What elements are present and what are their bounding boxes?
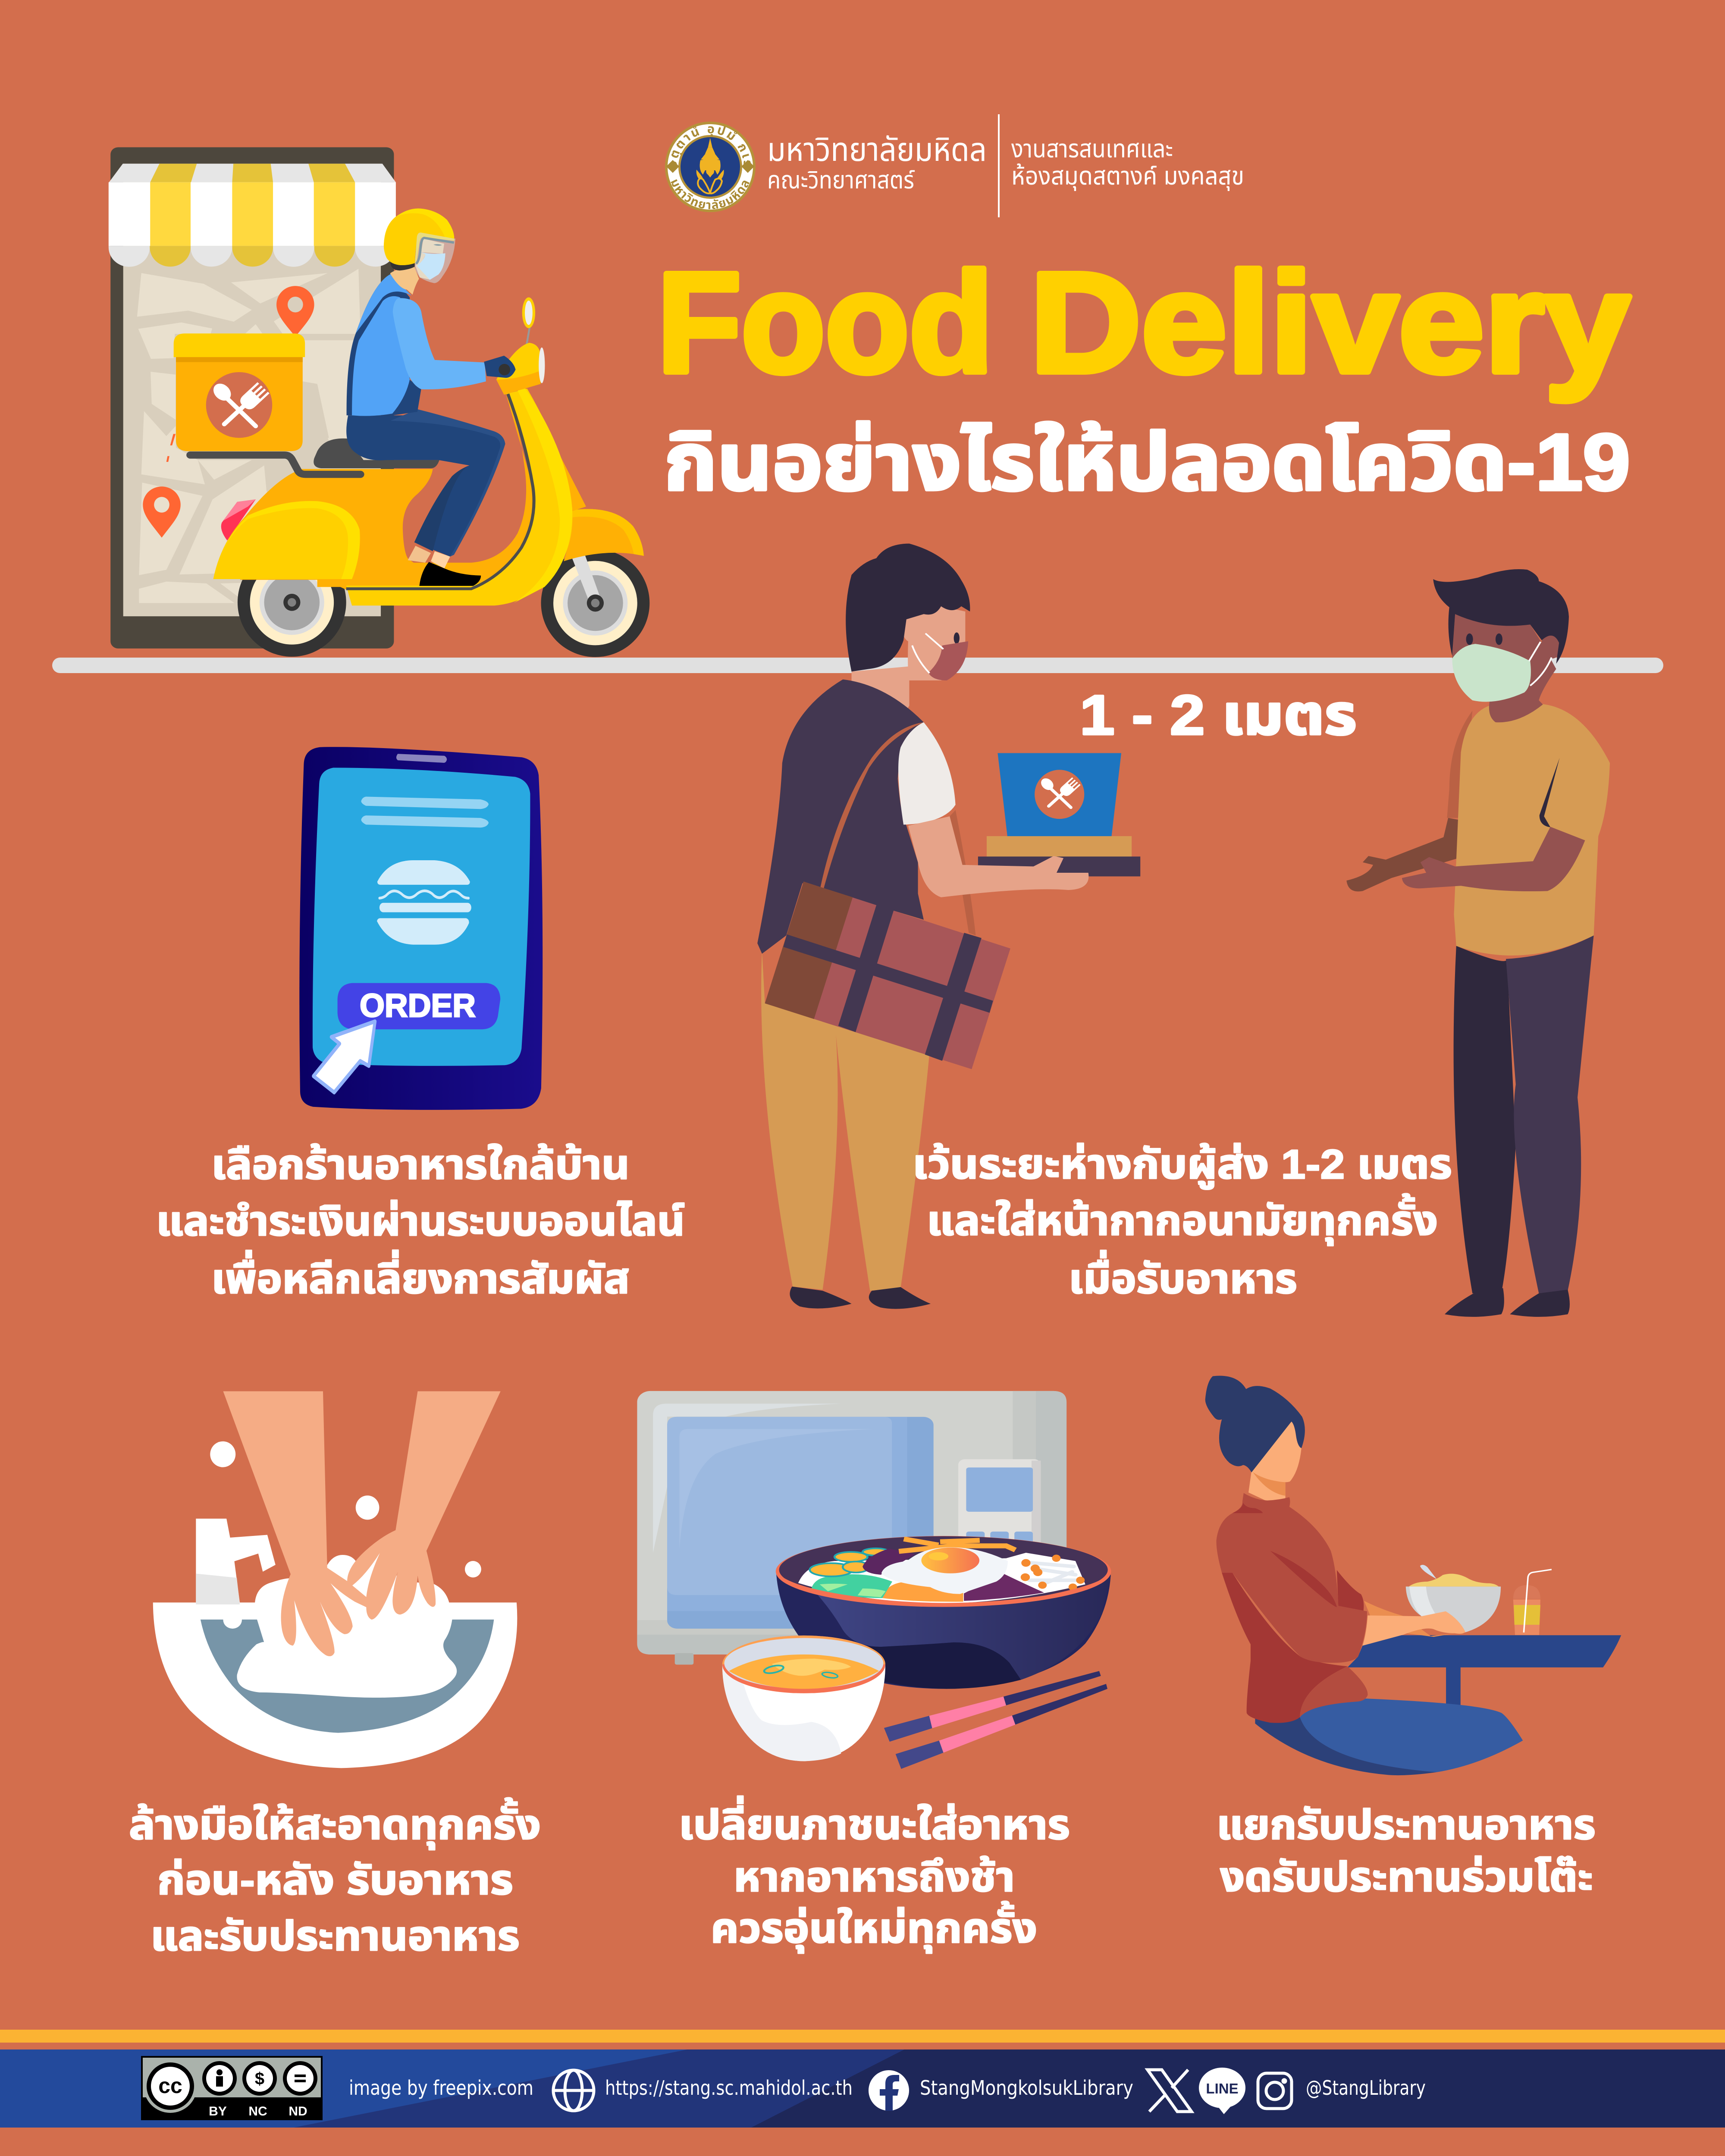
distance label: 1 - 2 เมตร [1080, 683, 1357, 746]
shoulder bag [765, 882, 1010, 1069]
bubbles [210, 1442, 481, 1577]
delivery person [1346, 569, 1610, 1317]
sink [153, 1602, 517, 1768]
illustration: delivery rider on scooter in front of phone map [109, 147, 649, 657]
rider body [346, 274, 516, 586]
title [657, 243, 1631, 403]
text block: eat separately [1217, 1802, 1596, 1900]
CC license badge: ND [289, 2104, 307, 2118]
awning [109, 164, 396, 267]
soup bowl [722, 1636, 885, 1761]
scooter body [190, 298, 644, 605]
logo seal [665, 122, 756, 212]
bowl of food [1406, 1565, 1501, 1633]
rear wheel [238, 548, 346, 657]
text block: choose nearby restaurant: และชำระเงินผ่านระบบออนไลน์ [156, 1198, 685, 1244]
title: Delivery [1030, 243, 1631, 403]
icon: globe [553, 2070, 594, 2111]
illustration: woman eating alone at table [1205, 1376, 1621, 1775]
fried egg [881, 1547, 1008, 1594]
image credit: image by freepix.com [349, 2076, 533, 2100]
facebook name: StangMongkolsukLibrary [920, 2076, 1133, 2100]
rider head with helmet and face shield [384, 208, 455, 295]
arm reaching to bowl [1362, 1611, 1465, 1646]
CC license badge [141, 2056, 323, 2120]
illustration: microwave and food bowls [637, 1391, 1111, 1769]
basin [201, 1620, 494, 1733]
map pin bottom [143, 486, 181, 538]
microwave [637, 1391, 1066, 1665]
header: Mahidol University logo and affiliation [665, 122, 987, 212]
far arm [1364, 1601, 1455, 1637]
emblem [696, 138, 724, 194]
illustration: receiving food with distance [757, 544, 1610, 1317]
road line [52, 658, 1663, 673]
library name: งานสารสนเทศและ [1011, 135, 1173, 163]
icon: spoon and fork [210, 380, 270, 431]
hands [223, 1391, 501, 1656]
sweater front [1217, 1493, 1367, 1663]
text block: choose nearby restaurant: เลือกร้านอาหารใกล้บ้าน [211, 1142, 630, 1188]
order button [338, 983, 500, 1029]
text block: change containers and reheat [679, 1796, 1070, 1953]
table top [1347, 1635, 1621, 1667]
icon: instagram [1258, 2073, 1292, 2109]
text block: change containers and reheat: หากอาหารถึงช้า [734, 1854, 1015, 1900]
text block: keep distance and wear mask: เว้นระยะห่างกับผู้ส่ง 1-2 เมตร [913, 1141, 1452, 1189]
food box on tray [978, 753, 1140, 876]
hair [1205, 1376, 1305, 1473]
text block: keep distance and wear mask: เมื่อรับอาหาร [1069, 1250, 1297, 1302]
food toppings [798, 1539, 1085, 1604]
person receiving food [757, 544, 976, 1309]
sweater back [1222, 1570, 1347, 1723]
CC license badge: cc [158, 2074, 182, 2098]
library name [1011, 135, 1244, 191]
text block: choose nearby restaurant [156, 1142, 685, 1302]
table leg [1446, 1666, 1461, 1708]
icon: X [1148, 2070, 1192, 2112]
drink cup [1513, 1570, 1552, 1635]
logo seal: อตฺตานํ อุปมํ กเร [665, 122, 755, 169]
seat [314, 439, 439, 468]
icon: facebook [869, 2070, 909, 2111]
text block: keep distance and wear mask [913, 1141, 1452, 1302]
subtitle: กินอย่างไรให้ปลอดโควิด-19 [664, 418, 1630, 507]
CC license badge: $ [255, 2069, 264, 2088]
social handle: @StangLibrary [1306, 2076, 1426, 2100]
icon: LINE [1199, 2068, 1245, 2114]
CC license badge: NC [248, 2104, 267, 2118]
delivery box [174, 333, 305, 451]
order button label: ORDER [360, 987, 476, 1024]
chopsticks [884, 1671, 1107, 1769]
neck and face [1248, 1422, 1302, 1501]
library name: ห้องสมุดสตางค์ มงคลสุข [1011, 162, 1244, 191]
front wheel [541, 549, 649, 657]
rack [190, 455, 361, 474]
soap foam [237, 1555, 457, 1698]
large bowl [776, 1536, 1111, 1689]
text block: keep distance and wear mask: และใส่หน้ากากอนามัยทุกครั้ง [927, 1193, 1438, 1246]
text block: eat separately: งดรับประทานร่วมโต๊ะ [1220, 1854, 1593, 1900]
text block: choose nearby restaurant: เพื่อหลีกเลี่ยงการสัมผัส [211, 1250, 630, 1302]
text block: wash hands: และรับประทานอาหาร [151, 1913, 520, 1959]
divider [998, 114, 1000, 217]
title: Food [657, 243, 993, 402]
pants [1255, 1717, 1436, 1775]
text block: wash hands: ล้างมือให้สะอาดทุกครั้ง [129, 1797, 541, 1850]
icon: LINE: LINE [1206, 2081, 1239, 2096]
receiving arm [908, 816, 1088, 897]
CC license badge: BY [209, 2104, 227, 2118]
faculty name: คณะวิทยาศาสตร์ [767, 166, 915, 194]
text block: wash hands [129, 1797, 541, 1959]
cursor arrow [314, 1022, 375, 1092]
phone with map [110, 147, 394, 649]
text block: change containers and reheat: ควรอุ่นใหม่ทุกครั้ง [711, 1901, 1037, 1953]
footer bar [0, 2049, 1725, 2128]
logo seal: มหาวิทยาลัยมหิดล [668, 176, 753, 212]
illustration: hand washing in sink [153, 1391, 517, 1768]
faucet [196, 1519, 276, 1604]
text block: eat separately: แยกรับประทานอาหาร [1217, 1802, 1596, 1848]
footer orange band [0, 2030, 1725, 2043]
map pin top [276, 286, 314, 337]
text block: wash hands: ก่อน-หลัง รับอาหาร [157, 1857, 513, 1903]
website url: https://stang.sc.mahidol.ac.th [605, 2076, 853, 2100]
handlebar and mirror [512, 326, 530, 360]
illustration: tablet with order button [299, 747, 543, 1110]
icon: burger [377, 860, 471, 945]
icon: spoon and fork [1038, 776, 1081, 811]
text block: change containers and reheat: เปลี่ยนภาชนะใส่อาหาร [679, 1796, 1070, 1848]
university name: มหาวิทยาลัยมหิดล [767, 132, 987, 168]
